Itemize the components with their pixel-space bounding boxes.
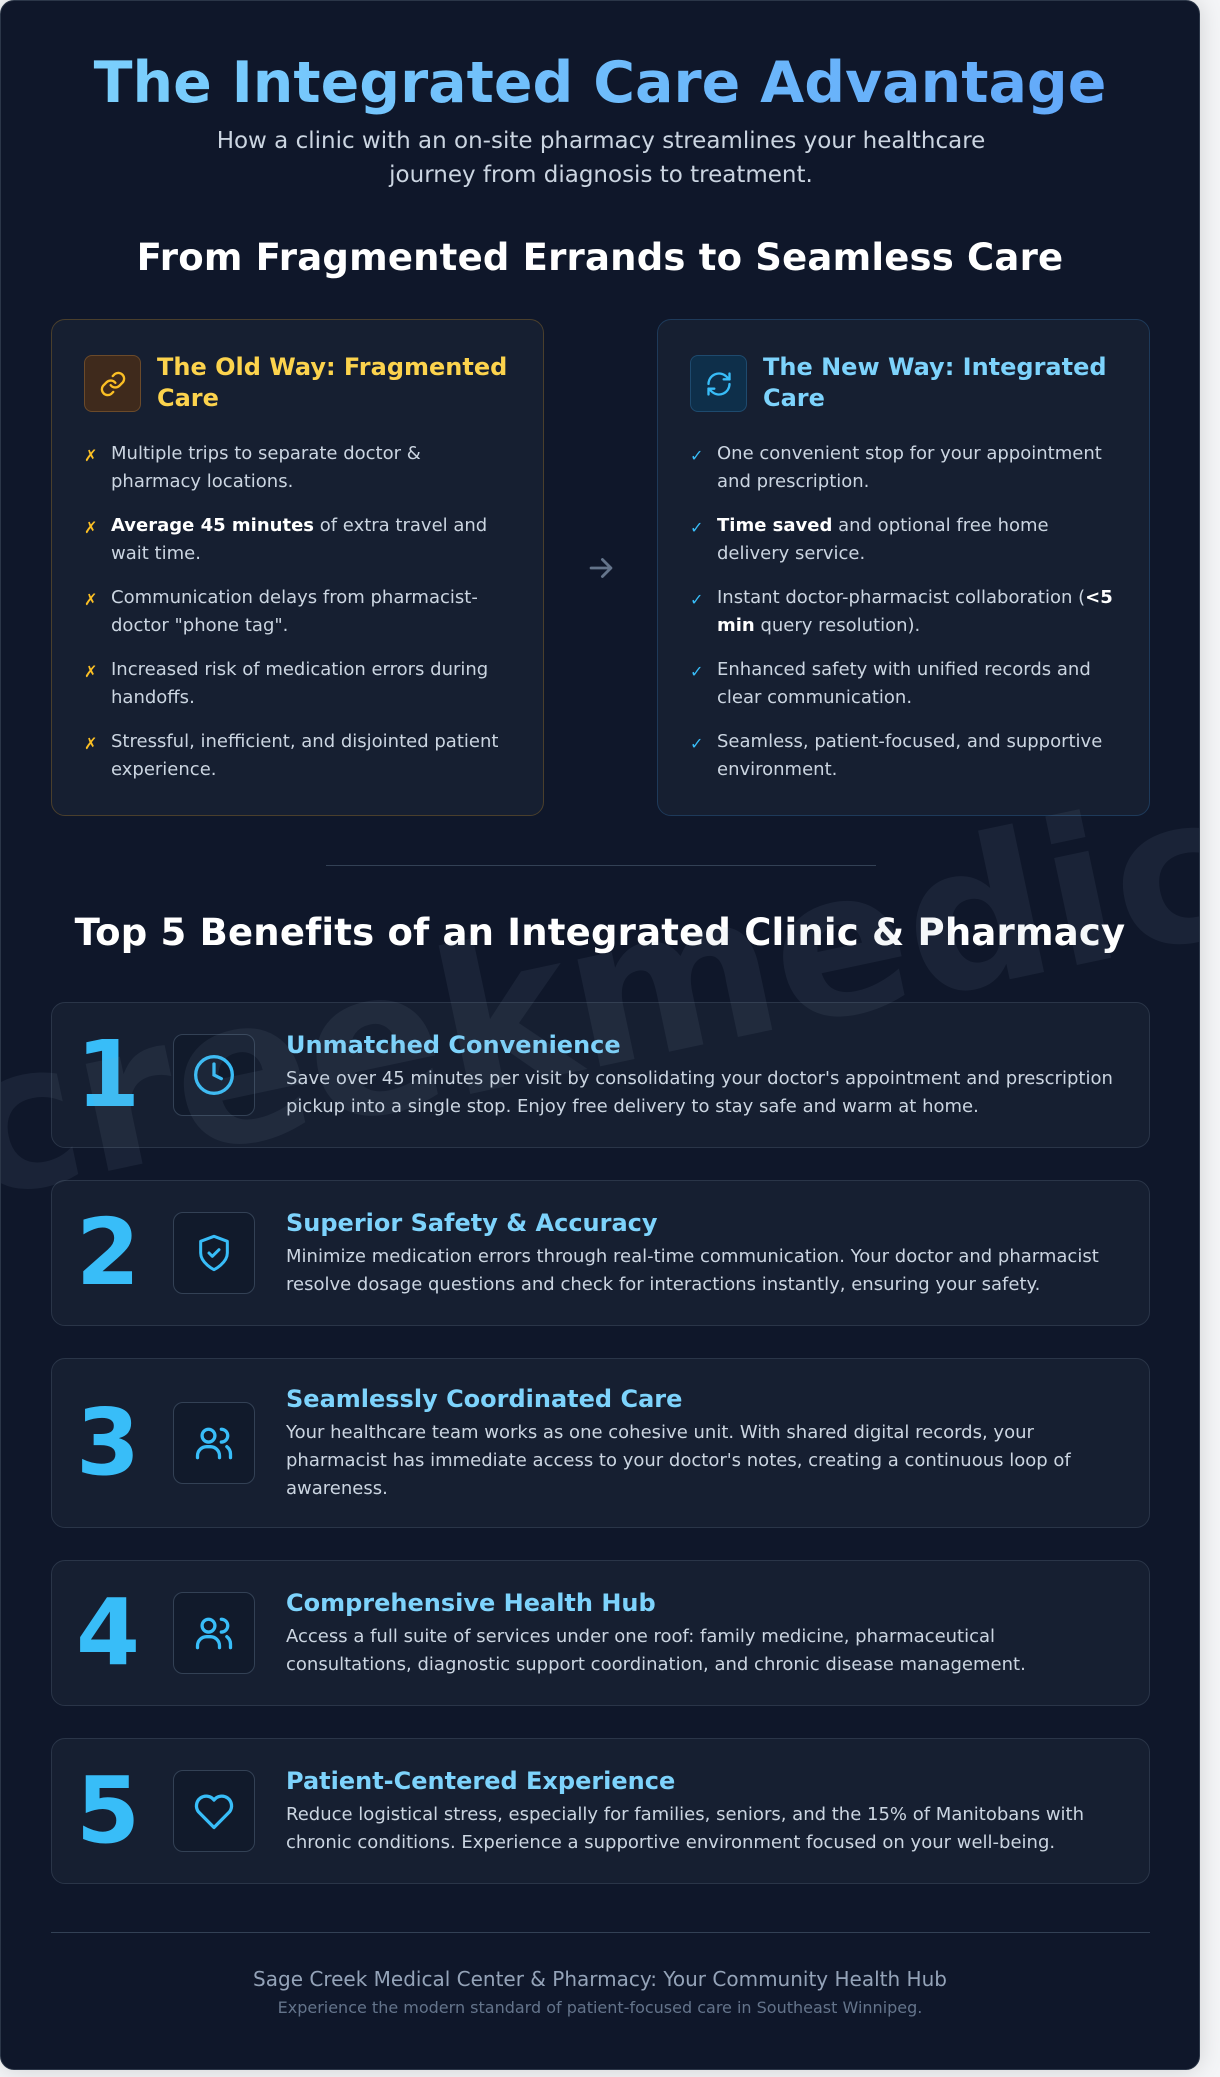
benefit 1: 1 — [76, 1021, 140, 1128]
new way list: Seamless, patient-focused, and supportive environment. — [717, 731, 1102, 780]
old way list: ✗ — [84, 446, 97, 465]
icon: users — [173, 1592, 255, 1674]
old way list: ✗ — [84, 734, 97, 753]
arrow — [590, 558, 612, 578]
title: The Integrated Care Advantage — [94, 50, 1106, 116]
new way header: The New Way: Integrated Care — [763, 353, 1107, 412]
new way list: ✓ — [690, 446, 703, 465]
benefit 5: Patient-Centered Experience — [286, 1767, 675, 1795]
new way list — [690, 443, 1113, 780]
new way list: ✓ — [690, 662, 703, 681]
new way list: One convenient stop for your appointment and prescription. — [717, 443, 1102, 492]
new way list: ✓ — [690, 590, 703, 609]
benefits list — [51, 1002, 1150, 1884]
new way list: Enhanced safety with unified records and clear communication. — [717, 659, 1091, 708]
heading: from fragmented to seamless: From Fragmented Errands to Seamless Care — [137, 236, 1063, 279]
old way list: Average 45 minutes of extra travel and wait time. — [111, 515, 487, 564]
old way list: Multiple trips to separate doctor & pharmacy locations. — [111, 443, 421, 492]
old way header: The Old Way: Fragmented Care — [157, 353, 507, 412]
benefit 5: Reduce logistical stress, especially for families, seniors, and the 15% of Manitobans with chronic conditions. Experience a supportive environment focused on your well-being. — [286, 1804, 1084, 1853]
old way list: Stressful, inefficient, and disjointed patient experience. — [111, 731, 498, 780]
icon: clock — [173, 1034, 255, 1116]
benefit 4: Comprehensive Health Hub — [286, 1589, 656, 1617]
footer: Sage Creek Medical Center & Pharmacy: Your Community Health Hub — [253, 1967, 947, 1991]
icon: chain link — [84, 355, 141, 412]
icon: users — [173, 1402, 255, 1484]
old way list — [84, 443, 498, 780]
benefit 1 — [51, 1002, 1150, 1148]
icon: shield check — [173, 1212, 255, 1294]
icon: heart — [173, 1770, 255, 1852]
panel: old way — [51, 319, 544, 816]
benefit 1: Unmatched Convenience — [286, 1031, 621, 1059]
old way list: Increased risk of medication errors during handoffs. — [111, 659, 488, 708]
icon: refresh — [690, 355, 747, 412]
benefit 4 — [51, 1560, 1150, 1706]
subtitle: How a clinic with an on-site pharmacy streamlines your healthcare journey from diagnosis to treatment. — [217, 128, 985, 188]
benefit 4: 4 — [76, 1579, 140, 1686]
new way list: ✓ — [690, 734, 703, 753]
old way list: ✗ — [84, 518, 97, 537]
benefit 3: Seamlessly Coordinated Care — [286, 1385, 682, 1413]
new way list: Instant doctor-pharmacist collaboration (<5 min query resolution). — [717, 587, 1113, 636]
benefit 2: Superior Safety & Accuracy — [286, 1209, 658, 1237]
old way list: ✗ — [84, 662, 97, 681]
panel: new way — [657, 319, 1150, 816]
footer — [253, 1967, 947, 2017]
benefit 2 — [51, 1180, 1150, 1326]
benefit 2: Minimize medication errors through real-time communication. Your doctor and pharmacist resolve dosage questions and check for interactions instantly, ensuring your safety. — [286, 1246, 1099, 1295]
new way list: Time saved and optional free home delivery service. — [717, 515, 1049, 564]
old way list: ✗ — [84, 590, 97, 609]
benefit 3: Your healthcare team works as one cohesive unit. With shared digital records, your pharmacist has immediate access to your doctor's notes, creating a continuous loop of awareness. — [286, 1422, 1071, 1499]
benefit 3: 3 — [76, 1389, 140, 1496]
new way list: ✓ — [690, 518, 703, 537]
old way list: Communication delays from pharmacist-doctor "phone tag". — [111, 587, 478, 636]
benefit 5 — [51, 1738, 1150, 1884]
benefit 5: 5 — [76, 1757, 140, 1864]
benefit 2: 2 — [76, 1199, 140, 1306]
benefit 1: Save over 45 minutes per visit by consolidating your doctor's appointment and prescription pickup into a single stop. Enjoy free delivery to stay safe and warm at home. — [286, 1068, 1113, 1117]
heading: top 5 benefits: Top 5 Benefits of an Integrated Clinic & Pharmacy — [75, 911, 1125, 954]
benefit 4: Access a full suite of services under one roof: family medicine, pharmaceutical consultations, diagnostic support coordination, and chronic disease management. — [286, 1626, 1026, 1675]
benefit 3 — [51, 1358, 1150, 1528]
footer: Experience the modern standard of patient-focused care in Southeast Winnipeg. — [278, 1998, 922, 2017]
